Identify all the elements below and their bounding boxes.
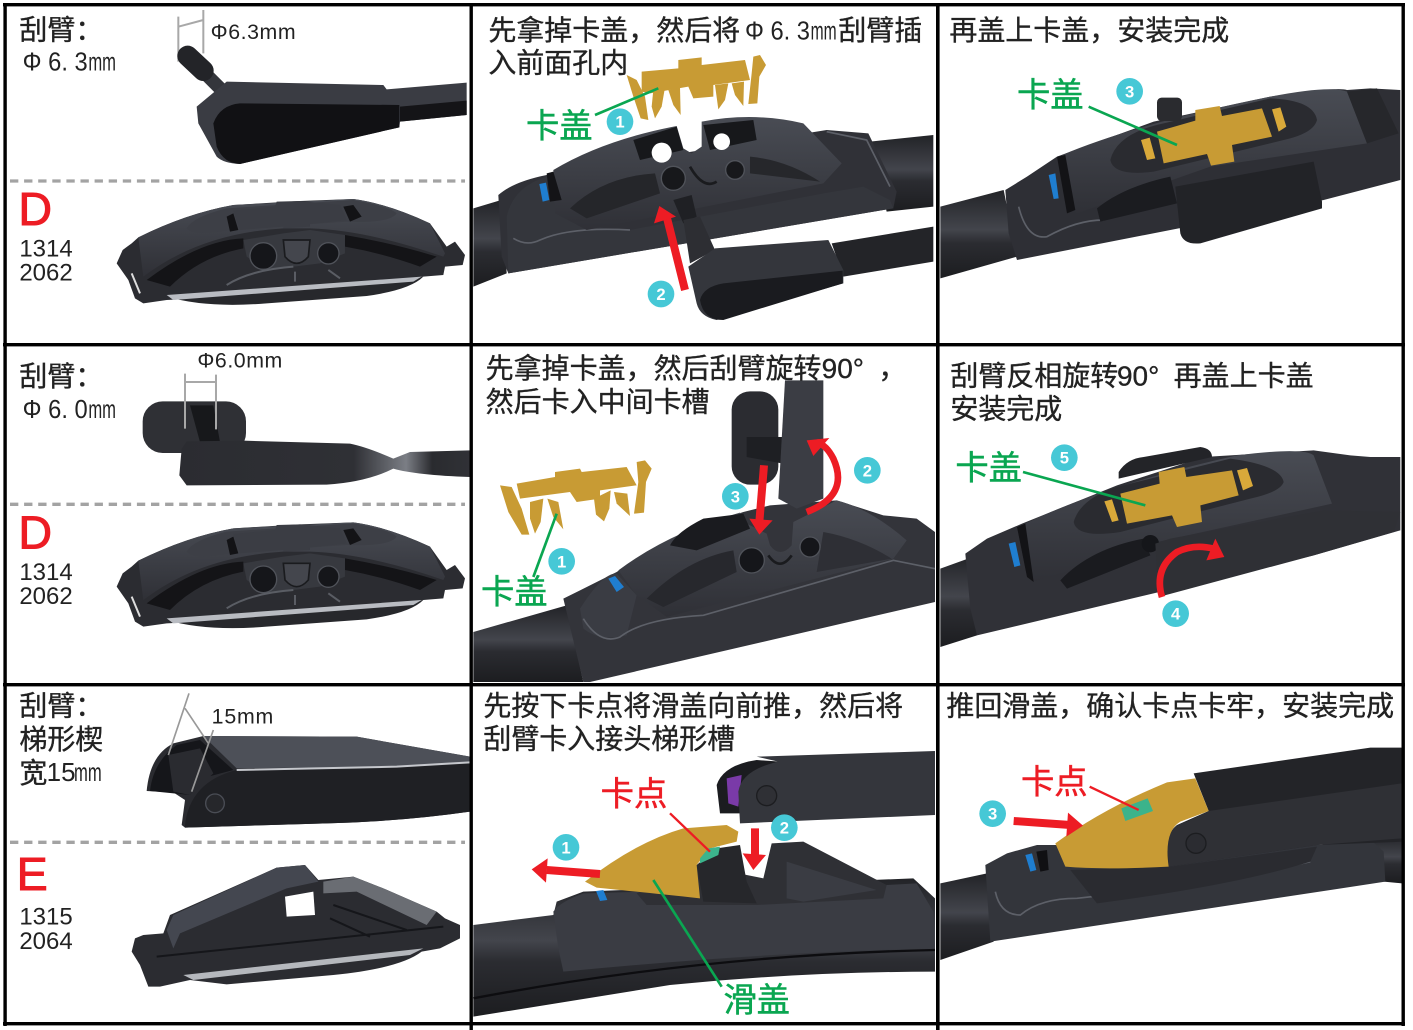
heading text: 然后卡入中间卡槽	[486, 386, 710, 417]
step badge 3	[1116, 78, 1143, 105]
callout: click point label	[601, 777, 710, 852]
callout: slide cover label	[653, 880, 790, 1020]
dimension label: Φ6.0mm	[197, 349, 282, 373]
panel: step push back slide cover	[940, 691, 1402, 960]
model codes: 1315	[19, 903, 73, 930]
spec: diameter: Φ 6. 3	[23, 47, 88, 77]
arm illustration	[147, 736, 470, 828]
arm illustration	[188, 56, 467, 164]
heading text: 安装完成	[950, 394, 1062, 425]
callout: slide cover label: 滑盖	[723, 983, 790, 1020]
heading text: 再盖上卡盖，安装完成	[949, 15, 1229, 46]
callout: clip cap label	[481, 514, 557, 612]
model codes	[19, 559, 73, 610]
heading text: 先拿掉卡盖，然后刮臂旋转	[486, 353, 821, 384]
heading text: 入前面孔内	[488, 48, 628, 79]
step badge 1	[548, 548, 575, 575]
step badge 1: 1	[615, 113, 625, 132]
heading text: 再盖上卡盖	[1174, 360, 1314, 391]
step badge 5: 5	[1060, 449, 1069, 468]
red curved arrow	[1160, 539, 1224, 597]
wiper arm vertical	[732, 380, 823, 509]
callout: clip cap label	[955, 451, 1145, 505]
gold slide cover	[585, 825, 738, 898]
model codes: 1314	[19, 559, 73, 586]
step badge 1: 1	[557, 552, 566, 571]
heading text: 刮臂插	[838, 15, 922, 46]
step badge 5	[1051, 444, 1078, 471]
step badge 4: 4	[1171, 605, 1181, 624]
wiper arm	[1175, 162, 1322, 244]
panel: step reattach cap	[940, 15, 1400, 278]
step badge 2	[854, 457, 881, 484]
panel: step remove cap, insert 6.3mm	[473, 15, 933, 320]
divider	[10, 499, 465, 509]
panel: step rotate back and reattach	[940, 360, 1400, 647]
pin	[1157, 98, 1182, 121]
heading text: 90°	[822, 353, 864, 384]
wiper arm	[1155, 510, 1400, 597]
step badge 3	[722, 483, 749, 510]
heading text	[483, 691, 903, 754]
model codes: 1314	[19, 236, 73, 263]
model codes: 2062	[19, 260, 73, 287]
heading text: 推回滑盖，确认卡点卡牢，安装完成	[946, 691, 1394, 722]
connector D illustration	[117, 199, 465, 305]
blade and connector	[473, 500, 935, 682]
callout: clip cap label: 卡盖	[481, 575, 548, 612]
gold clip cap	[1104, 467, 1253, 527]
red arrow right	[1014, 813, 1083, 837]
green clip point	[700, 847, 720, 863]
heading text: ，	[878, 353, 906, 384]
dimension caliper	[178, 10, 203, 62]
step badge 1	[607, 108, 633, 135]
dimension label: 15mm	[212, 704, 273, 728]
callout: clip cap label: 卡盖	[1017, 78, 1084, 115]
red arrow down	[749, 465, 773, 535]
panel: step rotate 90 and insert	[473, 353, 935, 682]
green click point	[1121, 798, 1153, 821]
model codes	[19, 903, 73, 955]
heading text	[488, 15, 922, 79]
step badge 4	[1162, 600, 1189, 627]
model codes: 2064	[19, 928, 73, 955]
blade and connector	[473, 842, 935, 1017]
dimension label: Φ6.3mm	[211, 20, 296, 44]
red curved arrow	[807, 438, 838, 512]
blade and connector	[473, 117, 933, 287]
heading: arm type: 15	[47, 757, 76, 787]
heading: arm type: 刮臂：	[19, 14, 103, 45]
model letter E: E	[17, 848, 48, 900]
red arrow down	[743, 828, 766, 870]
callout: click point label: 卡点	[1021, 764, 1088, 801]
model letter D: D	[18, 183, 52, 235]
wiper arm	[717, 751, 935, 823]
dimension caliper	[185, 374, 216, 429]
connector D illustration	[117, 522, 465, 628]
dimension lines	[168, 693, 213, 792]
step badge 1: 1	[561, 838, 571, 857]
callout: clip cap label: 卡盖	[526, 109, 593, 146]
step badge 2	[771, 814, 798, 841]
panel: arm 6.3mm spec	[10, 10, 467, 305]
spec: diameter: mm	[88, 394, 116, 424]
heading: arm type: 宽	[19, 757, 47, 788]
gold clip cap	[627, 55, 766, 120]
divider	[10, 176, 465, 186]
red arrow left	[532, 858, 600, 883]
arm illustration	[143, 401, 470, 485]
heading text	[950, 360, 1314, 425]
callout: clip cap label: 卡盖	[955, 451, 1022, 488]
panel: step push slide cover	[473, 691, 935, 1020]
panel: trapezoid arm 15mm spec	[10, 691, 470, 987]
step badge 1	[553, 834, 579, 861]
model codes: 2062	[19, 583, 73, 610]
heading: arm type: 刮臂：	[19, 361, 103, 392]
blade and connector	[940, 447, 1400, 647]
heading text: 先拿掉卡盖，然后将	[488, 15, 740, 46]
step badge 3: 3	[988, 805, 997, 824]
divider	[10, 837, 465, 847]
step badge 3: 3	[1125, 82, 1134, 101]
model letter D: D	[18, 506, 52, 558]
callout: click point label	[1021, 764, 1139, 810]
gold clip cap	[500, 460, 652, 535]
gold clip cap	[1141, 106, 1286, 166]
blade and connector	[940, 835, 1402, 960]
heading: arm type: 刮臂：	[19, 691, 103, 722]
heading text: 刮臂反相旋转	[950, 360, 1118, 391]
step badge 2: 2	[863, 461, 872, 480]
wiper arm	[673, 195, 933, 320]
callout: clip cap label	[526, 88, 658, 146]
heading text: 刮臂卡入接头梯形槽	[483, 723, 735, 754]
step badge 3	[979, 800, 1006, 827]
heading text: mm	[811, 15, 837, 45]
panel: arm 6.0mm spec	[10, 349, 470, 628]
step badge 3: 3	[731, 487, 740, 506]
heading text: 先按下卡点将滑盖向前推，然后将	[483, 691, 903, 722]
heading: arm type: mm	[74, 757, 102, 787]
step badge 2: 2	[780, 819, 789, 838]
spec: diameter: mm	[88, 47, 116, 77]
connector E illustration	[132, 865, 460, 987]
heading text: Φ 6. 3	[745, 15, 810, 45]
heading: arm type: 梯形楔	[19, 724, 103, 755]
callout: clip cap label	[1017, 78, 1177, 145]
wiper arm	[1167, 748, 1402, 867]
red arrow up	[654, 206, 685, 290]
model codes	[19, 236, 73, 287]
step badge 2	[648, 281, 674, 307]
callout: click point label: 卡点	[601, 777, 667, 814]
heading: arm type	[19, 691, 103, 788]
step badge 2: 2	[656, 285, 666, 304]
heading text	[486, 353, 906, 417]
gold slide cover	[1055, 778, 1209, 868]
spec: diameter: Φ 6. 0	[23, 394, 88, 424]
heading text: 90°	[1117, 360, 1159, 391]
blade and connector	[940, 88, 1400, 278]
